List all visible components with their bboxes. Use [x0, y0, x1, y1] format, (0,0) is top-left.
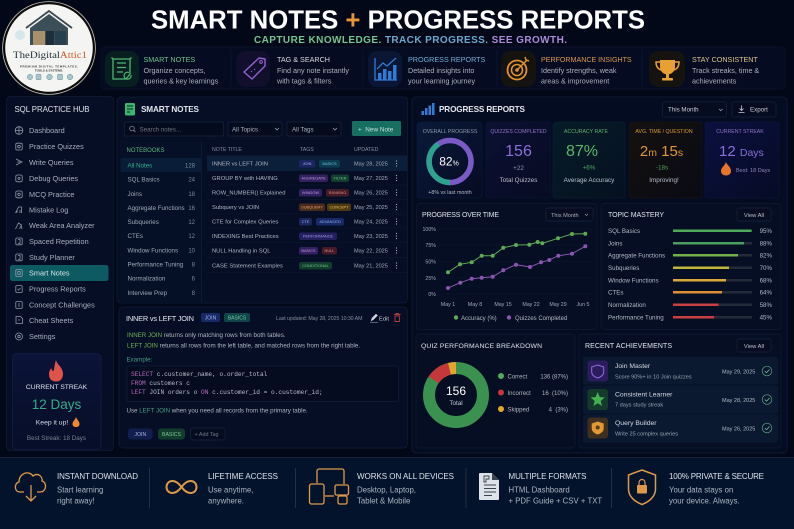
card: quizzes completed: QUIZZES COMPLETED — [490, 129, 547, 135]
nav list: Cheat Sheets — [29, 316, 74, 325]
streak card: CURRENT STREAK — [26, 384, 88, 391]
achievement: consistent learner: 7 days study streak — [615, 402, 663, 408]
card: average time — [629, 122, 702, 198]
card: quizzes completed — [486, 122, 550, 198]
row 1: JOIN — [303, 161, 312, 166]
card: accuracy rate — [553, 122, 625, 198]
card: average time: 2m 15s — [640, 143, 683, 160]
notebooks list: NOTEBOOKS — [126, 148, 165, 154]
notebooks list: Aggregate Functions — [128, 205, 185, 212]
row 3 — [212, 189, 388, 196]
nav list: MCQ Practice — [29, 190, 74, 199]
benefit: instant download: right away! — [57, 496, 95, 506]
row 6: PERFORMANCE — [303, 234, 334, 239]
row 3: ROW_NUMBER() Explained — [212, 190, 285, 196]
notebooks list: SQL Basics — [128, 176, 160, 184]
row 6: INDEXING Best Practices — [212, 234, 279, 240]
notebooks list: Normalization — [128, 276, 166, 282]
topic bars: 88% — [760, 240, 772, 248]
line chart: May 15 — [494, 302, 512, 308]
panel: sidebar — [6, 96, 114, 450]
edit action: Edit — [379, 316, 389, 322]
card: current streak: CURRENT STREAK — [716, 129, 764, 135]
row 3: WINDOW — [302, 190, 319, 195]
row 4: CONCEPT — [329, 205, 349, 210]
row 5: May 24, 2025 — [354, 220, 388, 226]
panel: note detail — [119, 307, 408, 448]
quiz legend — [498, 373, 568, 413]
line chart: 100% — [422, 227, 436, 233]
quiz legend: 136 (87%) — [540, 374, 568, 380]
card: overall progress: 82% — [439, 154, 459, 168]
card: accuracy rate: +6% — [583, 164, 596, 172]
nav list: Dashboard — [29, 126, 65, 135]
benefit: lifetime access: anywhere. — [208, 496, 244, 506]
row 7: May 22, 2025 — [354, 248, 388, 254]
bottom tags: + Add Tag — [194, 432, 219, 438]
topic bars: Aggregate Functions — [608, 252, 665, 260]
benefit: multiple formats: HTML Dashboard — [508, 486, 570, 494]
row 8 — [212, 262, 388, 270]
notebooks list: 18 — [188, 192, 196, 198]
row 7 — [212, 247, 388, 254]
panel: recent achievements: View All — [744, 344, 764, 350]
active nav highlight — [10, 265, 108, 281]
row menus — [396, 160, 397, 269]
line chart: 0% — [428, 292, 436, 298]
feature: progress reports: your learning journey — [408, 76, 476, 86]
row 1: BASICS — [322, 161, 337, 166]
line chart: 75% — [425, 243, 436, 249]
topic bars: CTEs — [608, 290, 623, 296]
achievement: query builder: May 26, 2025 — [722, 426, 755, 432]
note tags — [201, 313, 250, 322]
usage note: Use LEFT JOIN when you need all records from the primary table. — [126, 408, 308, 414]
notebooks list: Joins — [128, 191, 142, 198]
export button: Export — [750, 107, 768, 114]
note body text: Example: — [126, 356, 153, 364]
filter: tags: All Tags — [292, 126, 314, 134]
delete action — [394, 314, 400, 322]
card: quizzes completed: +22 — [513, 165, 524, 172]
line chart: Jun 5 — [577, 302, 590, 308]
topic bars: Window Functions — [608, 278, 659, 284]
line chart: Quizzes Completed — [515, 316, 567, 322]
row 5: CTE for Complex Queries — [212, 220, 278, 226]
logo badge — [3, 2, 95, 94]
row 8: May 21, 2025 — [354, 264, 388, 270]
achievement: consistent learner: May 28, 2025 — [722, 398, 755, 404]
row 1 — [212, 160, 388, 168]
period select — [662, 102, 726, 117]
panel: smart notes — [117, 97, 408, 303]
topic bars: Joins — [608, 240, 622, 248]
last updated: Last updated: May 28, 2025 10:30 AM — [276, 316, 362, 322]
notebooks list: 12 — [188, 234, 196, 240]
logo badge: TOOLS & SYSTEMS. — [35, 68, 63, 72]
donut centre: Total — [449, 400, 463, 407]
card: current streak: 12 Days — [719, 143, 764, 160]
topic bars: 95% — [760, 228, 772, 235]
edit action — [370, 314, 389, 322]
topic bars: 82% — [760, 252, 772, 260]
icon: flame — [49, 360, 63, 382]
topic bars: Normalization — [608, 302, 646, 309]
notebooks list — [120, 141, 202, 303]
benefit: lifetime access: LIFETIME ACCESS — [208, 472, 278, 481]
donut centre: 156 — [446, 384, 466, 398]
filter: topics: All Topics — [232, 126, 258, 134]
search box — [124, 122, 224, 136]
notebooks list: CTEs — [128, 233, 143, 240]
bottom tags — [128, 428, 225, 440]
topic bars: 64% — [760, 290, 772, 296]
card: accuracy rate: Average Accuracy — [564, 177, 615, 184]
sidebar heading: SQL PRACTICE HUB — [14, 105, 90, 114]
line chart: 50% — [425, 260, 436, 266]
benefit: private and secure — [628, 470, 764, 506]
panel: recent achievements: RECENT ACHIEVEMENTS — [585, 343, 672, 350]
topic bars: Subqueries — [608, 265, 639, 272]
feature: progress reports: Detailed insights into — [408, 66, 474, 75]
new note button: + New Note — [358, 126, 394, 134]
quiz legend: Skipped — [508, 407, 529, 413]
export button — [732, 102, 776, 117]
achievement: consistent learner: Consistent Learner — [615, 392, 673, 398]
donut centre — [446, 384, 466, 407]
notebooks list: 128 — [185, 164, 196, 170]
icon: notes — [125, 103, 135, 116]
row 7: NULL — [325, 248, 335, 253]
nav list: Write Queries — [29, 158, 74, 167]
quiz legend: Incorrect — [508, 391, 531, 397]
new note button — [352, 121, 401, 136]
benefit: works on all devices: Desktop, Laptop, — [357, 486, 416, 494]
feature: tag and search — [236, 51, 349, 87]
benefit: works on all devices: Tablet & Mobile — [357, 496, 410, 506]
row 6 — [212, 232, 388, 240]
period select: This Month — [668, 107, 699, 114]
footer band — [0, 457, 794, 529]
row 4 — [212, 204, 388, 211]
filter: tags — [287, 122, 341, 136]
row 2 — [212, 174, 388, 182]
notebooks list: Interview Prep — [128, 290, 168, 297]
notebooks list: 8 — [192, 262, 196, 268]
streak card — [12, 354, 101, 450]
card: accuracy rate: ACCURACY RATE — [564, 129, 608, 135]
row 1: INNER vs LEFT JOIN — [212, 162, 268, 168]
benefit: works on all devices: WORKS ON ALL DEVICES — [357, 472, 454, 481]
card: overall progress: OVERALL PROGRESS — [423, 129, 478, 135]
bottom tags: JOIN — [134, 432, 146, 438]
nav list: Settings — [29, 332, 56, 341]
row 1: May 28, 2025 — [354, 162, 388, 168]
notes table: UPDATED — [354, 147, 379, 153]
notes table — [207, 147, 407, 272]
code block: SELECT c.customer_name, o.order_total — [131, 371, 268, 378]
card: average time: Improving! — [649, 177, 679, 184]
code block: FROM customers c — [131, 380, 190, 387]
notebooks list: 16 — [188, 206, 196, 212]
topic bars: SQL Basics — [608, 228, 640, 235]
row 6: May 23, 2025 — [354, 234, 388, 240]
feature: stay consistent — [649, 51, 759, 87]
streak card: Keep it up! — [36, 420, 68, 426]
line chart: 25% — [425, 276, 436, 282]
note body text: LEFT JOIN returns all rows from the left table, and matched rows from the right table. — [127, 342, 360, 350]
benefit: multiple formats: + PDF Guide + CSV + TXT — [508, 496, 602, 506]
benefit: lifetime access — [166, 472, 278, 506]
topic bars: 70% — [760, 265, 772, 272]
notebooks list: 10 — [188, 248, 196, 254]
quiz legend: 16 (10%) — [542, 391, 568, 397]
notes table: TAGS — [300, 147, 314, 153]
topic bars: Performance Tuning — [608, 314, 664, 322]
benefit: multiple formats: MULTIPLE FORMATS — [508, 472, 586, 481]
topic bars: 45% — [760, 314, 772, 322]
benefit: instant download: INSTANT DOWNLOAD — [57, 472, 138, 481]
filter: topics — [228, 122, 282, 136]
card: overall progress: +8% vs last month — [428, 190, 472, 196]
row 4: SUBQUERY — [301, 205, 323, 210]
notebooks list: 24 — [188, 178, 196, 184]
nav list: Spaced Repetition — [29, 237, 89, 246]
nav list: Debug Queries — [29, 174, 78, 183]
panel: topic mastery — [601, 204, 781, 330]
feature: smart notes: Organize concepts, — [144, 66, 205, 75]
search box: Search notes... — [140, 126, 181, 133]
nav list — [15, 126, 95, 341]
topic bars: 68% — [760, 278, 772, 284]
row 4: May 25, 2025 — [354, 205, 388, 211]
notebooks list: 8 — [192, 291, 196, 297]
feature: progress reports — [368, 51, 486, 87]
card: current streak: Best: 18 Days — [736, 168, 770, 174]
note body text: INNER JOIN returns only matching rows from both tables. — [127, 332, 286, 339]
note tags: JOIN — [205, 316, 217, 322]
feature: stay consistent: Track streaks, time & — [692, 66, 759, 75]
card: quizzes completed: 156 — [505, 143, 532, 160]
feature: performance insights: PERFORMANCE INSIGHTS — [541, 56, 632, 64]
line chart — [422, 227, 592, 322]
feature: stay consistent: STAY CONSISTENT — [692, 55, 759, 64]
row 7: BASICS — [301, 248, 316, 253]
line chart: May 29 — [549, 302, 567, 308]
panel: progress over time — [416, 204, 597, 330]
nav list: Concept Challenges — [29, 300, 95, 310]
panel: progress reports — [412, 97, 787, 453]
logo badge: PREMIUM DIGITAL TEMPLATES, — [20, 64, 78, 68]
benefit: lifetime access: Use anytime, — [208, 486, 254, 494]
panel: quiz performance breakdown: QUIZ PERFORMANCE BREAKDOWN — [421, 343, 542, 350]
nav list: Study Planner — [29, 253, 75, 262]
row 2: May 27, 2025 — [354, 176, 388, 182]
notebooks list: 6 — [192, 276, 196, 282]
feature: performance insights — [501, 51, 632, 87]
quiz legend: Correct — [508, 374, 528, 380]
notebooks list: Window Functions — [128, 248, 178, 254]
achievement: join master: Score 90%+ in 10 Join quizzes — [615, 374, 692, 380]
nav list: Mistake Log — [29, 206, 68, 214]
achievement: join master: Join Master — [615, 363, 651, 370]
code block — [127, 366, 398, 402]
card: average time: -18s — [656, 164, 668, 172]
donut chart — [429, 368, 483, 422]
panel: quiz performance breakdown — [416, 334, 575, 448]
feature strip — [101, 47, 785, 89]
card: quizzes completed: Total Quizzes — [500, 177, 537, 184]
row 5: ADVANCED — [319, 219, 341, 224]
panel: topic mastery: View All — [744, 213, 764, 219]
feature: tag and search: Find any note instantly — [277, 66, 349, 75]
line chart: May 1 — [441, 302, 455, 308]
feature: performance insights: areas & improvement — [541, 76, 609, 86]
heading: progress reports: PROGRESS REPORTS — [439, 105, 526, 114]
achievement: consistent learner — [583, 386, 778, 414]
benefit: works on all devices — [310, 469, 454, 506]
feature: performance insights: Identify strengths, weak — [541, 66, 617, 75]
panel: progress over time: This Month — [551, 213, 579, 219]
row 7: NULL Handling in SQL — [212, 248, 271, 254]
row 2: AGGREGATE — [301, 176, 326, 181]
row 4: Subquery vs JOIN — [212, 205, 259, 211]
feature: tag and search: with tags & filters — [276, 76, 332, 86]
benefit: instant download — [15, 472, 138, 506]
row 2: GROUP BY with HAVING — [212, 176, 278, 182]
panel: recent achievements — [579, 334, 781, 448]
achievement: join master: May 29, 2025 — [722, 370, 755, 376]
notebooks list: All Notes — [128, 162, 152, 170]
achievement: join master — [583, 357, 778, 384]
benefit: private and secure: 100% PRIVATE & SECURE — [669, 472, 764, 481]
row 5: CTE — [302, 219, 310, 224]
streak card: Best Streak: 18 Days — [27, 435, 86, 442]
benefit: private and secure: Your data stays on — [669, 486, 733, 494]
notes table: NOTE TITLE — [212, 147, 242, 153]
feature: stay consistent: achievements — [692, 76, 737, 86]
line chart: Accuracy (%) — [461, 316, 497, 322]
achievement: query builder: Write 25 complex queries — [615, 432, 678, 438]
notebooks list: Subqueries — [128, 219, 159, 226]
panel: topic mastery: TOPIC MASTERY — [608, 212, 664, 219]
row 2: FILTER — [333, 176, 347, 181]
notebooks list: Performance Tuning — [128, 262, 184, 268]
nav list: Practice Quizzes — [29, 142, 84, 151]
logo badge: TheDigital Attic1 — [13, 51, 87, 61]
card: overall progress — [417, 122, 482, 198]
feature: smart notes — [105, 51, 219, 87]
benefit: instant download: Start learning — [57, 486, 103, 494]
note heading: INNER vs LEFT JOIN — [126, 314, 194, 323]
topic bars — [608, 228, 772, 322]
achievement: query builder: Query Builder — [615, 420, 657, 427]
title: SMART NOTES + PROGRESS REPORTS — [151, 6, 645, 34]
feature: smart notes: queries & key learnings — [144, 76, 219, 86]
note body text — [126, 332, 360, 364]
row 5 — [212, 218, 388, 226]
subtitle: CAPTURE KNOWLEDGE. TRACK PROGRESS. SEE GROWTH. — [254, 35, 567, 46]
row 8: CASE Statement Examples — [212, 264, 283, 270]
achievement: query builder — [583, 414, 778, 442]
code block: LEFT JOIN orders o ON c.customer_id = o.customer_id; — [131, 389, 323, 396]
bottom tags: BASICS — [162, 432, 182, 438]
card: accuracy rate: 87% — [566, 143, 598, 160]
note tags: BASICS — [228, 316, 247, 322]
card: current streak — [705, 122, 779, 198]
quiz legend: 4 (3%) — [549, 407, 568, 413]
nav list: Progress Reports — [29, 284, 86, 294]
notebooks list: 12 — [188, 220, 196, 226]
row 3: RANKING — [329, 190, 346, 195]
nav list: Weak Area Analyzer — [29, 221, 95, 230]
feature: progress reports: PROGRESS REPORTS — [408, 55, 486, 64]
row 3: May 26, 2025 — [354, 190, 388, 196]
row 8: CONDITIONAL — [302, 263, 330, 268]
nav list: Smart Notes — [29, 268, 70, 278]
topic bars: 58% — [760, 302, 772, 309]
line chart: May 8 — [468, 302, 482, 308]
line chart: May 22 — [522, 302, 540, 308]
feature: smart notes: SMART NOTES — [144, 55, 195, 64]
panel: progress over time: PROGRESS OVER TIME — [422, 212, 499, 219]
card: average time: AVG. TIME / QUESTION — [635, 129, 693, 135]
icon: bars — [422, 103, 434, 115]
benefit: multiple formats — [479, 472, 602, 506]
feature: tag and search: TAG & SEARCH — [277, 55, 330, 64]
streak card: 12 Days — [32, 397, 82, 412]
benefit: private and secure: your device. Always. — [669, 496, 740, 506]
heading: smart notes: SMART NOTES — [141, 105, 200, 114]
